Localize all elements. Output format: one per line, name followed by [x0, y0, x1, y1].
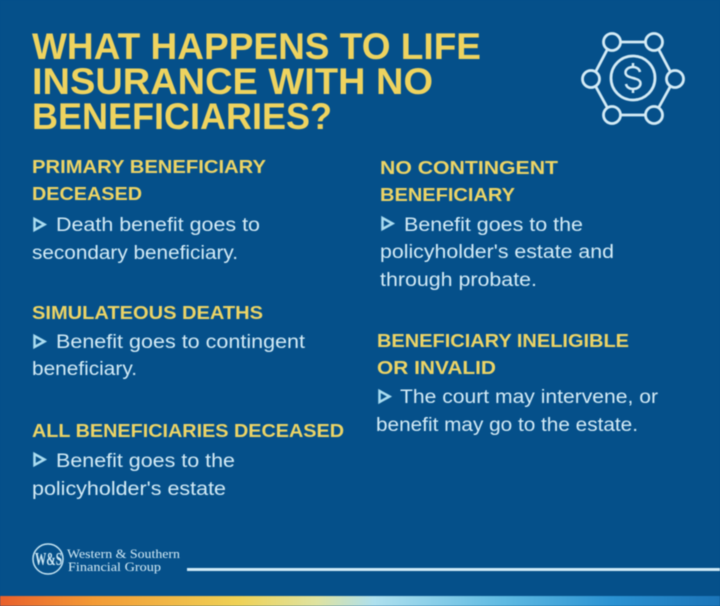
block: simultaneous deaths: SIMULATEOUS DEATHS: [32, 302, 263, 323]
gradient footer bar: [0, 596, 720, 606]
title: [32, 26, 481, 137]
block: primary beneficiary deceased: [32, 156, 267, 264]
footer rule: [187, 568, 720, 571]
title: WHAT HAPPENS TO LIFE: [32, 26, 481, 67]
title: INSURANCE WITH NO: [32, 61, 433, 102]
logo: Western & Southern Financial Group: [33, 544, 181, 574]
logo: Western & Southern Financial Group: Western & Southern: [67, 547, 181, 561]
block: beneficiary ineligible or invalid: [376, 330, 659, 436]
block: no contingent beneficiary: NO CONTINGENT: [380, 157, 559, 178]
block: no contingent beneficiary: Benefit goes to the: [404, 215, 583, 236]
block: primary beneficiary deceased: PRIMARY BENEFICIARY: [32, 156, 267, 177]
block: primary beneficiary deceased: Death benefit goes to: [56, 215, 260, 236]
block: beneficiary ineligible or invalid: OR INVALID: [377, 357, 496, 378]
block: no contingent beneficiary: policyholder's estate and: [380, 242, 614, 263]
block: primary beneficiary deceased: DECEASED: [32, 183, 142, 204]
block: all beneficiaries deceased: policyholder's estate: [32, 479, 226, 500]
block: beneficiary ineligible or invalid: The court may intervene, or: [400, 387, 659, 408]
block: no contingent beneficiary: [380, 157, 614, 291]
block: beneficiary ineligible or invalid: benefit may go to the estate.: [376, 415, 638, 436]
block: beneficiary ineligible or invalid: BENEFICIARY INELIGIBLE: [377, 330, 629, 351]
block: all beneficiaries deceased: Benefit goes to the: [56, 451, 235, 472]
block: no contingent beneficiary: BENEFICIARY: [380, 184, 516, 205]
block: no contingent beneficiary: through probate.: [380, 270, 537, 291]
block: simultaneous deaths: beneficiary.: [32, 359, 137, 380]
title: BENEFICIARIES?: [32, 96, 332, 137]
block: simultaneous deaths: [32, 302, 306, 380]
block: all beneficiaries deceased: [32, 420, 344, 500]
logo: Western & Southern Financial Group: W&S: [35, 549, 62, 569]
block: all beneficiaries deceased: ALL BENEFICIARIES DECEASED: [32, 420, 344, 441]
block: simultaneous deaths: Benefit goes to contingent: [56, 332, 306, 353]
icon: dollar network hexagon: [582, 34, 684, 124]
block: primary beneficiary deceased: secondary beneficiary.: [32, 243, 238, 264]
logo: Western & Southern Financial Group: Financial Group: [68, 560, 161, 574]
